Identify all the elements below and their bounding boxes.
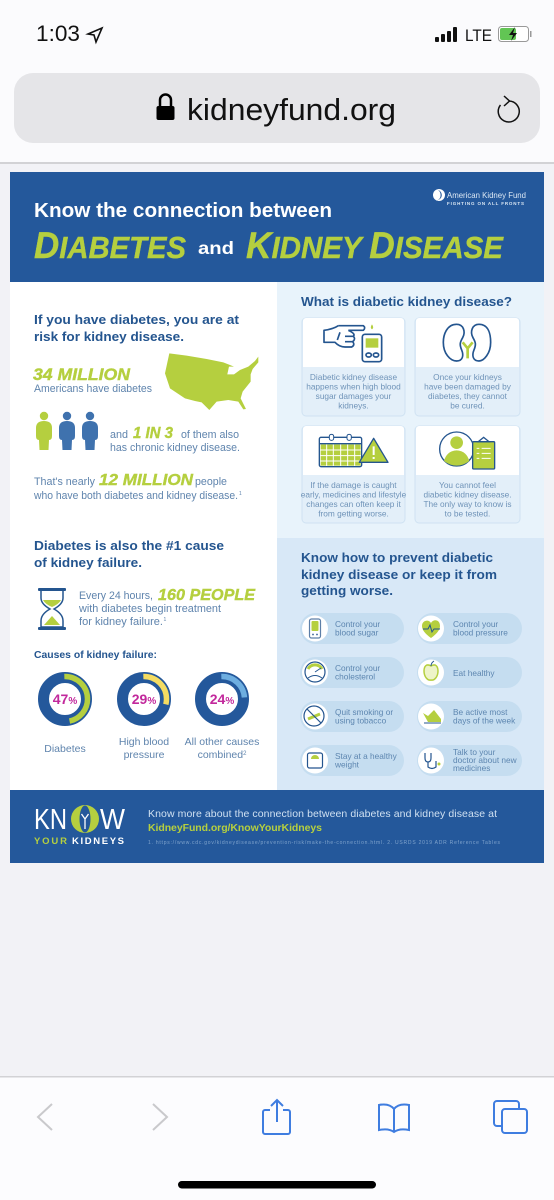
tip: cholesterol: Control your xyxy=(335,663,380,673)
text: diabetes, they cannot xyxy=(428,391,508,401)
text: The only way to know is xyxy=(423,499,512,509)
panel: what is diabetic kidney disease xyxy=(277,282,544,538)
icon: heart xyxy=(422,620,440,638)
tip: blood sugar: blood sugar xyxy=(335,628,379,638)
card: caught early xyxy=(301,426,407,523)
text: diabetic kidney disease. xyxy=(423,490,512,500)
icon: three people xyxy=(36,412,98,450)
url bar xyxy=(14,73,540,143)
label: high blood pressure xyxy=(119,736,169,761)
tip: blood sugar: Control your xyxy=(335,619,380,629)
tip: be active: days of the week xyxy=(453,716,516,726)
logo: know your kidneys: YOUR xyxy=(34,836,67,847)
icon: share xyxy=(263,1100,290,1134)
text: changes can often keep it xyxy=(306,499,401,509)
tip: cholesterol xyxy=(300,657,404,688)
donut chart: high blood pressure 29%: 29% xyxy=(132,691,156,707)
logo: know your kidneys: KIDNEYS xyxy=(72,836,124,847)
stat: 12 million: 1 xyxy=(239,491,242,497)
icon: apple xyxy=(424,661,438,680)
icon: USA map xyxy=(165,353,258,410)
title highlighted: KIDNEY DISEASE xyxy=(246,225,504,266)
logo: American Kidney Fund: American Kidney Fund xyxy=(447,190,526,200)
label: diabetes: Diabetes xyxy=(44,743,86,755)
heading: what is: What is diabetic kidney disease? xyxy=(301,294,512,309)
icon: tabs xyxy=(494,1101,527,1133)
url text: kidneyfund.org xyxy=(187,92,396,127)
tip: blood sugar xyxy=(300,613,404,644)
stat: 1 in 3: and xyxy=(110,429,128,441)
stat: 160 people: 160 PEOPLE xyxy=(158,587,256,604)
tip: quit smoking: Quit smoking or xyxy=(335,707,393,717)
title highlighted: and xyxy=(198,238,234,258)
icon: forward arrow xyxy=(153,1104,167,1130)
icon: reload xyxy=(498,96,519,122)
logo: know your kidneys: W xyxy=(100,804,126,836)
heading: prevent: Know how to prevent diabetic xyxy=(301,550,493,565)
stat: 12 million: people xyxy=(195,476,227,488)
icon: shoe xyxy=(423,710,441,723)
icon: gauge xyxy=(305,662,325,682)
browser bottom toolbar xyxy=(0,1076,554,1200)
tip: eat healthy: Eat healthy xyxy=(453,668,495,678)
text: happens when high blood xyxy=(306,382,401,392)
text: early, medicines and lifestyle xyxy=(301,490,407,500)
donut chart: other causes 24% xyxy=(200,676,244,722)
heading: prevent: kidney disease or keep it from xyxy=(301,567,497,582)
heading: prevent: getting worse. xyxy=(301,583,393,598)
stat: 160 people: 1 xyxy=(164,617,166,623)
status time xyxy=(36,21,102,46)
heading: at risk xyxy=(34,312,240,344)
logo: American Kidney Fund xyxy=(433,189,526,206)
text xyxy=(306,372,401,410)
stat: 12 million xyxy=(33,472,242,502)
footer message: Know more about the connection between diabetes and kidney disease at xyxy=(148,808,497,820)
text: be cured. xyxy=(450,400,485,410)
text xyxy=(301,480,407,518)
icon: finger and meter xyxy=(324,324,382,362)
panel: risk and kidney failure (left) xyxy=(10,282,277,790)
stat: 12 million: That's nearly xyxy=(34,476,96,488)
tip: healthy weight: Stay at a healthy xyxy=(335,751,398,761)
card: cannot be cured xyxy=(415,318,520,416)
status icons: LTE xyxy=(465,26,492,45)
icon: stethoscope xyxy=(425,753,440,768)
home indicator xyxy=(178,1181,376,1188)
logo: know your kidneys xyxy=(34,804,126,847)
stat: 1 in 3: 1 IN 3 xyxy=(133,425,173,442)
title line: Know the connection between xyxy=(34,200,332,222)
title highlighted xyxy=(34,225,504,266)
stat: 12 million: who have both diabetes and kidney disease. xyxy=(33,490,238,502)
tip: blood pressure: blood pressure xyxy=(453,628,508,638)
stat: 160 people: for kidney failure. xyxy=(79,616,163,628)
icon: no smoking xyxy=(304,706,324,726)
stat: 12 million: 12 MILLION xyxy=(99,472,193,489)
stat: 160 people xyxy=(78,587,256,628)
tip: cholesterol: cholesterol xyxy=(335,672,375,682)
title highlighted: DIABETES xyxy=(34,225,186,266)
heading: at risk: If you have diabetes, you are at xyxy=(34,312,240,327)
card: high blood sugar xyxy=(302,318,405,416)
text xyxy=(424,372,512,410)
status time: 1:03 xyxy=(36,21,80,46)
text: to be tested. xyxy=(445,508,490,518)
icon: doctor and clipboard xyxy=(440,432,495,469)
heading: number one cause xyxy=(34,538,224,570)
card: cannot feel xyxy=(415,426,520,523)
stat: 1 in 3: of them also xyxy=(181,429,239,441)
label: other causes: All other causes xyxy=(185,736,259,748)
text: sugar damages your xyxy=(316,391,392,401)
label: high blood pressure: pressure xyxy=(124,749,165,761)
tip: blood pressure xyxy=(417,613,522,644)
subheading: causes: Causes of kidney failure: xyxy=(34,649,157,661)
icon: back arrow xyxy=(38,1104,52,1130)
label: high blood pressure: High blood xyxy=(119,736,169,748)
infographic header xyxy=(10,172,544,282)
heading: at risk: risk for kidney disease. xyxy=(34,329,184,344)
donut chart: high blood pressure 29% xyxy=(122,676,166,722)
icon: meter xyxy=(310,619,320,638)
tip: healthy weight xyxy=(300,745,404,776)
tip: blood pressure: Control your xyxy=(453,619,498,629)
tip: talk to doctor: Talk to your xyxy=(453,747,496,757)
label: other causes xyxy=(185,736,259,761)
browser top bar xyxy=(0,0,554,164)
label: other causes: combined xyxy=(198,749,243,761)
donut chart: other causes 24%: 24% xyxy=(210,691,234,707)
status icons xyxy=(435,26,532,45)
heading: prevent xyxy=(301,550,497,598)
icon: bookmarks xyxy=(379,1104,409,1132)
stat: 1 in 3: has chronic kidney disease. xyxy=(110,442,240,454)
tip: be active xyxy=(417,701,522,732)
label: other causes: 2 xyxy=(243,751,247,757)
footer link: KidneyFund.org/KnowYourKidneys xyxy=(148,822,322,834)
stat: 160 people: Every 24 hours, xyxy=(79,590,153,602)
heading: number one cause: of kidney failure. xyxy=(34,555,142,570)
tip: be active: Be active most xyxy=(453,707,508,717)
text: If the damage is caught xyxy=(310,480,397,490)
logo: know your kidneys: KN xyxy=(34,804,67,836)
icon: lock xyxy=(156,94,174,120)
text: Diabetic kidney disease xyxy=(310,372,397,382)
panel: how to prevent xyxy=(277,538,544,790)
tip: eat healthy xyxy=(417,657,522,688)
text: have been damaged by xyxy=(424,382,512,392)
donut chart: diabetes 47% xyxy=(42,676,88,722)
heading: number one cause: Diabetes is also the #1 cause xyxy=(34,538,224,553)
icon: scale xyxy=(308,753,322,768)
tip: talk to doctor: doctor about new xyxy=(453,755,518,765)
text: You cannot feel xyxy=(439,480,496,490)
tip: talk to doctor xyxy=(417,745,522,776)
stat: 1 in 3 xyxy=(110,425,240,454)
stat: 34 million xyxy=(33,366,153,395)
stat: 160 people: with diabetes begin treatment xyxy=(78,603,221,615)
tip: talk to doctor: medicines xyxy=(453,763,490,773)
text: Once your kidneys xyxy=(433,372,502,382)
stat: 34 million: Americans have diabetes xyxy=(34,383,153,395)
footnotes: 1. https://www.cdc.gov/kidneydisease/prevention-risk/make-the-connection.html. 2. USRDS 2019 ADR Reference Tables xyxy=(148,840,501,846)
tip: quit smoking xyxy=(300,701,404,732)
text: kidneys. xyxy=(338,400,369,410)
icon: kidneys xyxy=(443,324,491,361)
footer xyxy=(10,790,544,863)
text xyxy=(423,480,512,518)
tip: healthy weight: weight xyxy=(334,760,360,770)
logo: American Kidney Fund: FIGHTING ON ALL FRONTS xyxy=(447,201,524,206)
tip: quit smoking: using tobacco xyxy=(335,716,387,726)
stat: 34 million: 34 MILLION xyxy=(33,366,131,384)
donut chart: diabetes 47%: 47% xyxy=(53,691,77,707)
icon: hourglass xyxy=(38,588,66,630)
icon: calendar and warning xyxy=(319,434,388,467)
text: from getting worse. xyxy=(318,508,389,518)
